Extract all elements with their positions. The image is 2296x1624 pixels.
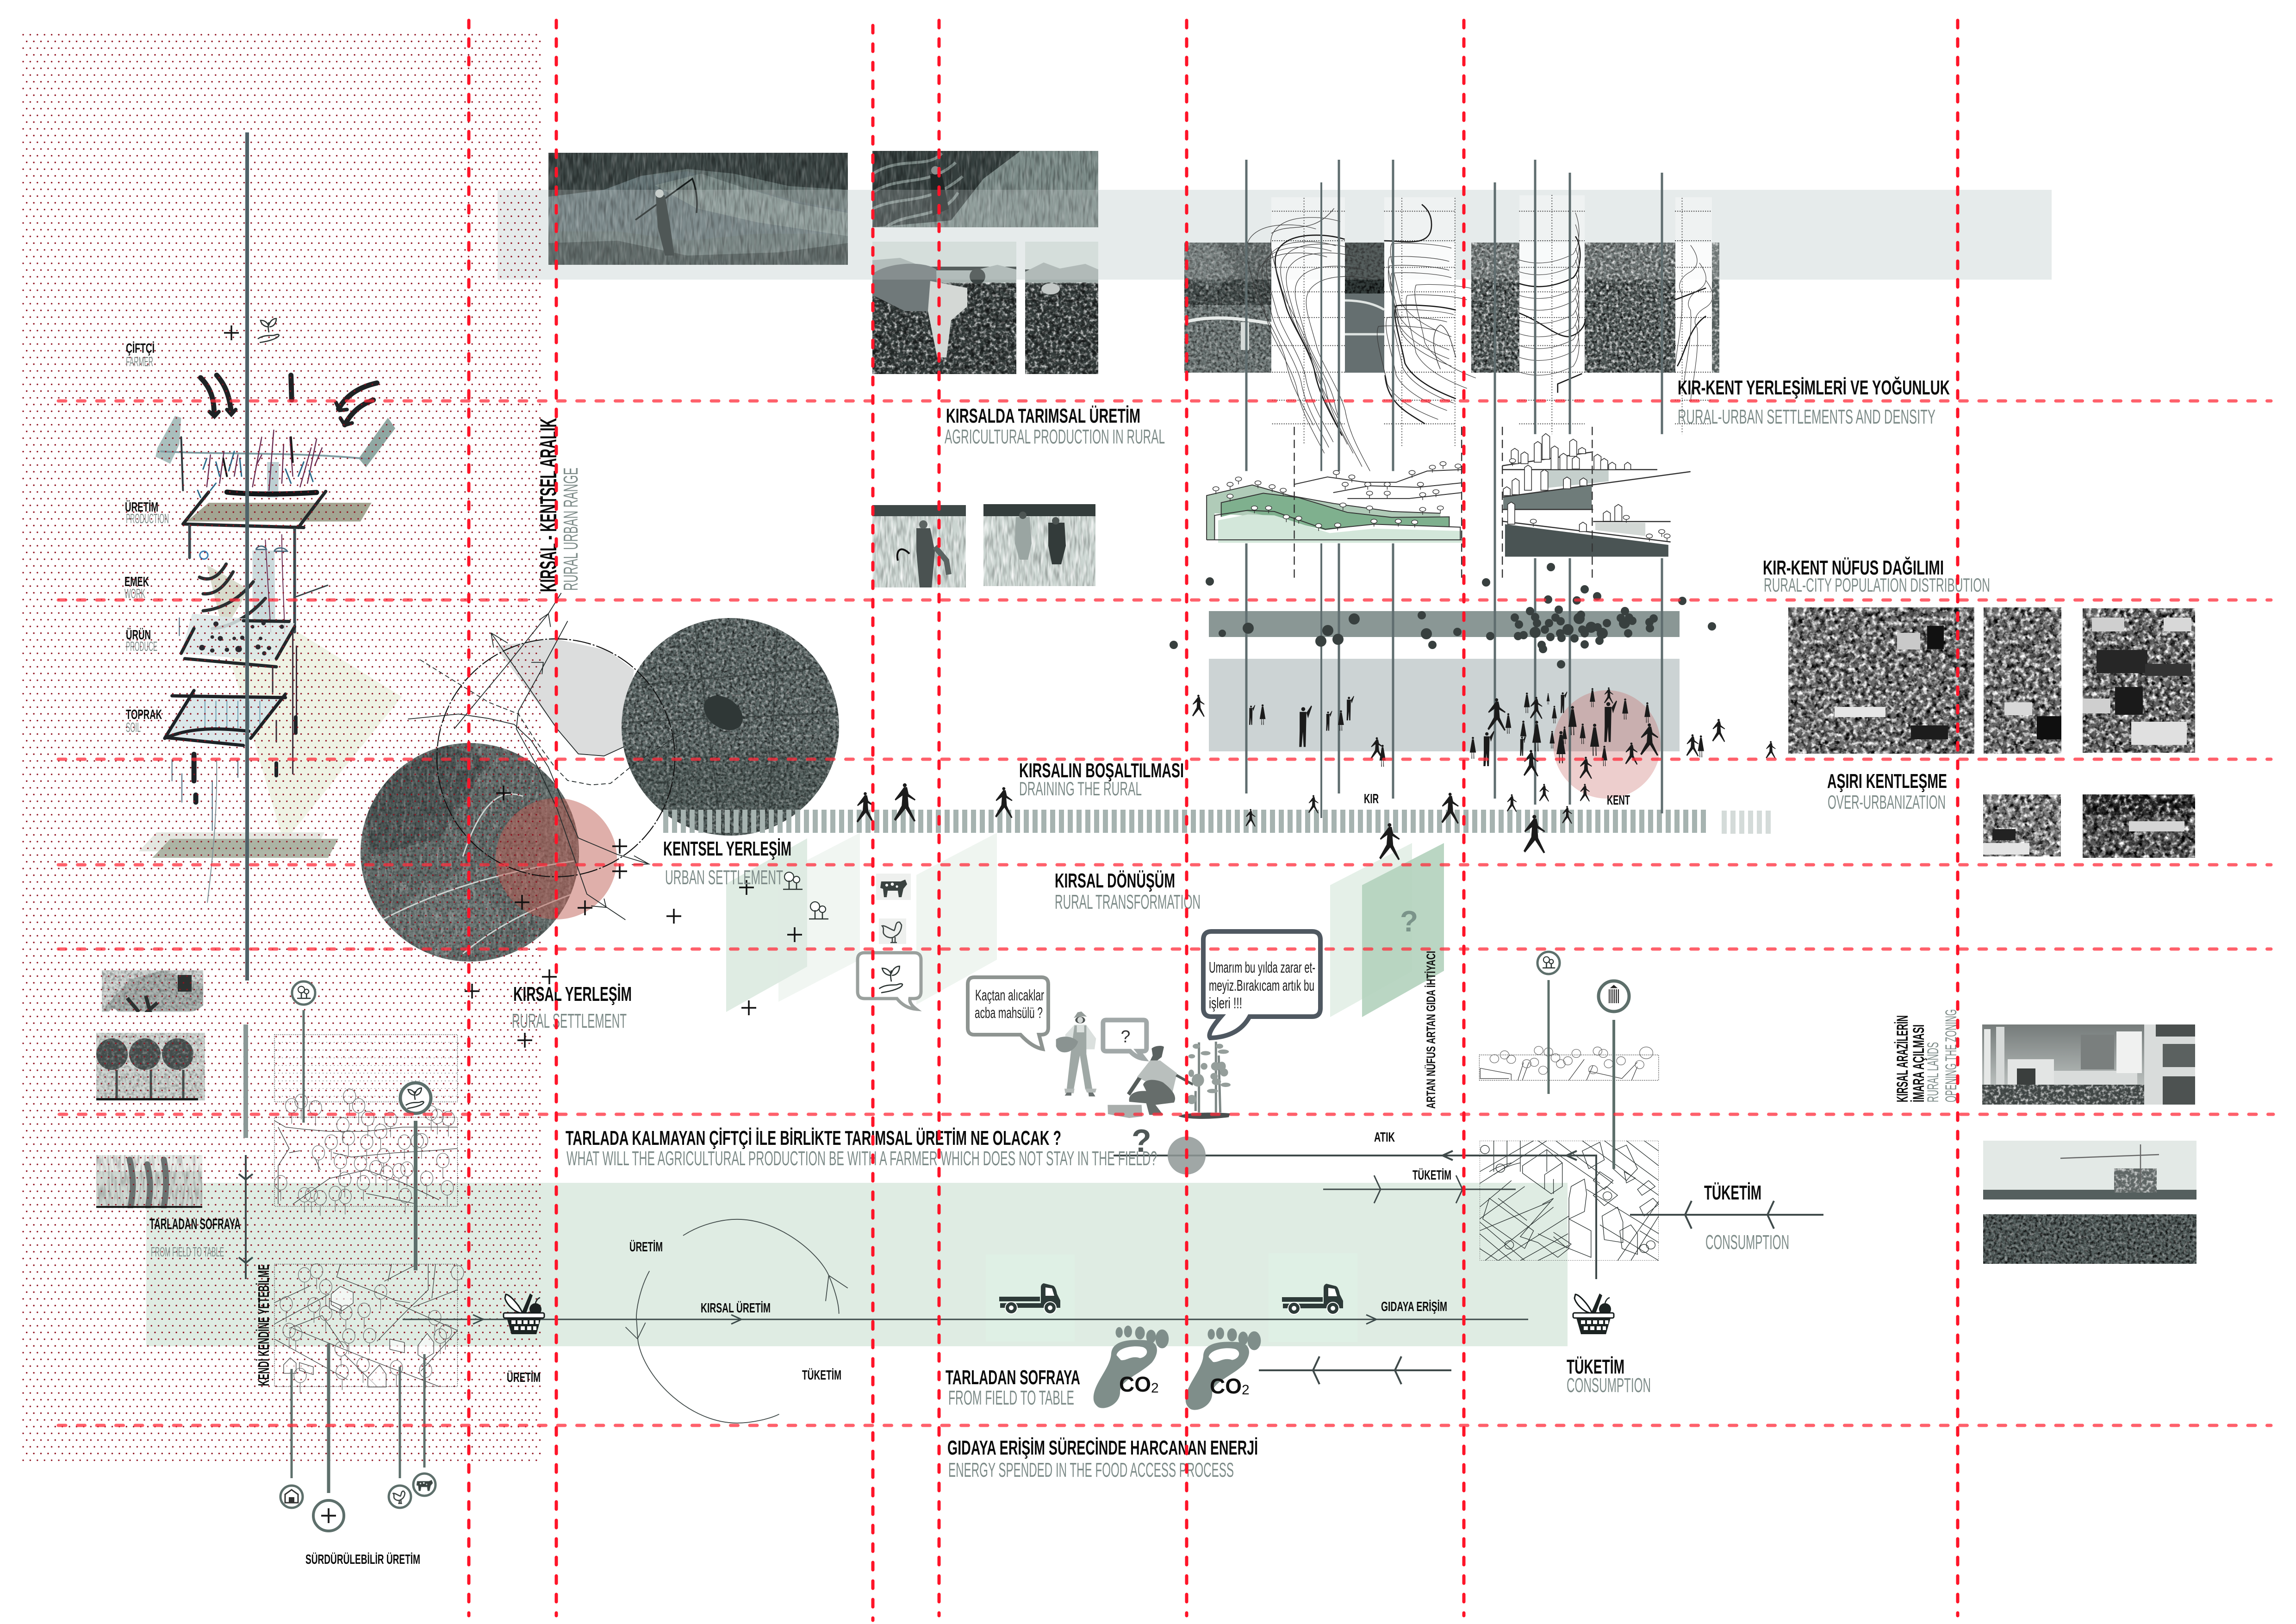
heading: consumption right: TÜKETİM — [1704, 1181, 1761, 1204]
crouching man — [1108, 1046, 1193, 1118]
icon: farm house — [280, 1369, 303, 1508]
heading: from field to table: FROM FIELD TO TABLE — [948, 1387, 1074, 1409]
heading: draining the rural: DRAINING THE RURAL — [1019, 778, 1142, 800]
small diagram labels: TÜKETİM — [802, 1368, 841, 1383]
heading: rural settlement: KIRSAL YERLEŞİM — [513, 983, 632, 1006]
heading: population distribution: RURAL-CITY POPULATION DISTRIBUTION — [1764, 574, 1990, 596]
photo: woman reaping — [872, 505, 966, 587]
watercolour sketch: farming layers — [156, 375, 395, 831]
icon: truck right — [1282, 1284, 1343, 1314]
icon: truck left — [999, 1283, 1060, 1314]
icon: trees — [292, 981, 315, 1123]
left layer labels: WORK — [124, 587, 145, 601]
speech bubble: farmer worry: Umarım bu yılda zarar et- — [1209, 959, 1315, 976]
heading: energy spent: ENERGY SPENDED IN THE FOOD ACCESS PROCESS — [948, 1459, 1234, 1481]
heading: rural settlement — [512, 983, 632, 1032]
shanty photo small — [2083, 794, 2195, 858]
vertical label: rising population: ARTAN NÜFUS ARTAN GIDA İHTİYACI — [1424, 951, 1438, 1109]
left layer labels: FARMER — [126, 355, 153, 369]
heading: rural urban range — [535, 418, 582, 592]
aerial photos strip: rural and urban settlements — [1184, 243, 1719, 373]
heading: what will agricultural production be: TARLADA KALMAYAN ÇİFTÇİ İLE BİRLİKTE TARIMSAL ÜRETİM NE OLACAK ? — [566, 1127, 1061, 1149]
photo: farmer bending in the field — [872, 242, 1016, 374]
label: from field to table in green band: TARLADAN SOFRAYA — [149, 1216, 241, 1232]
icon: barcode on city stem — [1599, 981, 1629, 1169]
speech bubble: sprout — [858, 953, 921, 1009]
photo: forest — [1983, 1214, 2196, 1264]
question bubble — [1103, 1020, 1146, 1059]
striped band: draining the rural — [663, 810, 1709, 833]
shanty photo — [2083, 608, 2195, 753]
stippled circle segment — [495, 639, 634, 756]
heading: consumption right — [1704, 1181, 1789, 1254]
consumption arrow right — [1630, 1201, 1823, 1229]
vertical labels: opening rural lands to zoning — [1894, 1009, 1960, 1102]
plus markers — [224, 325, 802, 1048]
heading: draining the rural — [1019, 759, 1184, 800]
dark sketch arrows over circles — [408, 593, 698, 920]
village isometric box — [274, 1264, 464, 1393]
plant and animal tiles on planes — [783, 872, 911, 944]
heading: settlements and density: KIR-KENT YERLEŞİMLERİ VE YOĞUNLUK — [1678, 376, 1950, 399]
small photos left column — [96, 970, 205, 1208]
small diagram labels — [305, 792, 1630, 1567]
rural section drawing — [1201, 427, 1463, 582]
silhouettes of migrating people — [857, 687, 1776, 860]
village plan box — [274, 1089, 457, 1216]
icon: sprout — [400, 1083, 431, 1270]
photo: crane on horizon — [1983, 1141, 2196, 1199]
halftone dot field — [20, 32, 541, 1463]
consumption arrow to city — [1323, 1175, 1516, 1203]
photo: two reapers — [983, 504, 1095, 586]
small diagram labels: KENT — [1607, 793, 1630, 808]
speech bubble: farmer worry — [1203, 931, 1320, 1038]
speech bubble: buyers — [968, 977, 1048, 1049]
small diagram labels: TÜKETİM — [1412, 1168, 1451, 1183]
pink city circle — [1553, 690, 1661, 799]
heading: energy spent — [947, 1437, 1258, 1481]
waste arrow — [1114, 1151, 1596, 1279]
band overlay on photos — [498, 190, 2052, 280]
icon: CO2 footprint right: 2 — [1242, 1382, 1250, 1398]
photo: terraced hillside with woman — [872, 151, 1098, 227]
cycle of rural production — [626, 1219, 848, 1423]
heading: agricultural production — [945, 405, 1165, 448]
heading: rural urban range: RURAL URBAN RANGE — [560, 468, 582, 591]
grey circle with question mark — [1132, 1123, 1206, 1174]
left layer labels: SOIL — [126, 720, 141, 735]
heading: over urbanization: OVER-URBANIZATION — [1828, 791, 1946, 813]
heading: agricultural production: AGRICULTURAL PRODUCTION IN RURAL — [945, 425, 1165, 448]
main vertical line left — [245, 132, 249, 981]
heading: rural urban range: KIRSAL - KENTSEL ARALIK — [535, 418, 561, 592]
heading: from field to table — [946, 1366, 1080, 1409]
speech bubble: farmer worry: işleri !!! — [1209, 994, 1242, 1012]
heading: population distribution: KIR-KENT NÜFUS DAĞILIMI — [1763, 556, 1944, 579]
pale striped band end — [1722, 811, 1771, 834]
vertical label: self sufficiency: KENDİ KENDİNE YETEBİLME — [255, 1264, 272, 1386]
city photo small — [1983, 794, 2061, 856]
heading: consumption under basket: CONSUMPTION — [1567, 1374, 1651, 1397]
thin sketch line lower — [207, 759, 217, 903]
woman with basket — [1056, 1012, 1096, 1096]
population bar dark — [1209, 611, 1680, 637]
grey background band — [498, 190, 2052, 280]
small diagram labels: KIR — [1364, 792, 1379, 806]
vertical settlement axis lines — [1246, 160, 1662, 818]
city photo 2 — [1984, 607, 2061, 754]
heading: consumption under basket — [1567, 1355, 1651, 1397]
left layer labels: ÇİFTÇİ — [126, 341, 155, 356]
small diagram labels: SÜRDÜRÜLEBİLİR ÜRETİM — [305, 1552, 420, 1567]
heading: urban settlement — [663, 837, 791, 889]
photo: farmer with scythe — [548, 153, 848, 265]
icon: basket left — [504, 1293, 544, 1334]
speech bubble: buyers: Kaçtan alıcaklar — [975, 987, 1044, 1004]
icon: CO2 footprint right — [1186, 1327, 1261, 1410]
pale triangle behind sketch — [222, 629, 402, 843]
left layer labels — [124, 341, 169, 735]
aerial circle: urban settlement — [622, 618, 839, 836]
heading: settlements and density — [1678, 376, 1950, 428]
illustration: farmers and plants — [1056, 1012, 1231, 1119]
truck tile left — [986, 1255, 1075, 1342]
aerial circle: rural settlement — [361, 743, 579, 962]
transformation planes with question mark: ? — [1400, 905, 1418, 938]
left layer labels: ÜRETİM — [125, 500, 158, 515]
tomato plants — [1187, 1042, 1231, 1112]
heading: what will agricultural production be — [566, 1127, 1157, 1170]
energy arrow — [1259, 1356, 1451, 1384]
photo: farmer in distance — [1025, 242, 1098, 374]
heading: rural transformation: KIRSAL DÖNÜŞÜM — [1055, 869, 1175, 892]
small diagram labels: ÜRETİM — [507, 1370, 541, 1385]
icon: CO2 footprint right: CO — [1210, 1374, 1242, 1398]
transformation planes left — [726, 833, 997, 1012]
top dotted field box — [274, 1035, 457, 1102]
heading: population distribution — [1763, 556, 1990, 596]
label: from field to table in green band: FROM FIELD TO TABLE — [151, 1245, 224, 1260]
heading: what will agricultural production be: WHAT WILL THE AGRICULTURAL PRODUCTION BE WITH A FARMER WHICH DOES NOT STAY IN THE FIELD? — [566, 1147, 1157, 1170]
heading: from field to table: TARLADAN SOFRAYA — [946, 1366, 1080, 1389]
icon: cow — [413, 1354, 436, 1496]
icon: plus — [313, 1343, 344, 1531]
icon: rooster — [389, 1367, 411, 1508]
icon: CO2 footprint left: 2 — [1151, 1380, 1159, 1396]
icon stems and circles: sustainable production — [280, 981, 436, 1531]
icon: sprout in hand — [258, 319, 279, 343]
top city plan box — [1479, 1046, 1659, 1081]
icon: trees on city stem — [1537, 952, 1560, 1094]
heading: consumption right: CONSUMPTION — [1705, 1231, 1789, 1254]
isometric city plan box — [1480, 1141, 1659, 1261]
small diagram labels: GIDAYA ERİŞİM — [1381, 1299, 1447, 1314]
truck tile right — [1269, 1253, 1357, 1342]
heading: agricultural production: KIRSALDA TARIMSAL ÜRETİM — [946, 405, 1140, 427]
heading: settlements and density: RURAL-URBAN SETTLEMENTS AND DENSITY — [1678, 406, 1935, 428]
heading: rural transformation — [1055, 869, 1201, 913]
city photo 1 — [1788, 607, 1974, 754]
contour map panels — [1246, 195, 1713, 477]
heading: urban settlement: URBAN SETTLEMENT — [665, 866, 783, 889]
label: from field to table in green band — [149, 1216, 241, 1260]
speech bubble: buyers: acba mahsülü ? — [975, 1004, 1043, 1021]
heading: rural transformation: RURAL TRANSFORMATION — [1055, 891, 1201, 913]
dash-dot circle — [437, 639, 675, 877]
icon: CO2 footprint left — [1094, 1325, 1169, 1408]
small diagram labels: KIRSAL ÜRETİM — [701, 1300, 771, 1316]
small diagram labels: ATIK — [1374, 1130, 1395, 1145]
dotted village boxes — [274, 1035, 464, 1393]
vertical labels: opening rural lands to zoning: İMARA AÇILMASI — [1910, 1024, 1928, 1102]
main arrow: rural production to food access — [403, 1315, 1528, 1324]
photo: city rising on farmland — [1982, 1024, 2195, 1105]
text: PRODUCTION — [126, 512, 169, 526]
heading: urban settlement: KENTSEL YERLEŞİM — [663, 837, 791, 860]
heading: rural settlement: RURAL SETTLEMENT — [512, 1010, 627, 1032]
population bar light — [1209, 659, 1680, 751]
left layer labels: ÜRÜN — [126, 627, 151, 643]
left vertical grey segment — [243, 1024, 248, 1138]
population dots — [1170, 563, 1716, 668]
urban section drawing — [1500, 427, 1692, 582]
vertical arrow down — [239, 1155, 253, 1279]
heading: over urbanization: AŞIRI KENTLEŞME — [1827, 770, 1947, 793]
pink circle overlay — [496, 798, 617, 919]
heading: over urbanization — [1827, 770, 1947, 813]
small diagram labels: ÜRETİM — [629, 1239, 663, 1255]
vertical labels: opening rural lands to zoning: OPENING THE ZONING — [1942, 1009, 1960, 1102]
heading: energy spent: GIDAYA ERİŞİM SÜRECİNDE HARCANAN ENERJİ — [947, 1437, 1258, 1459]
green band: from field to table — [146, 1183, 1568, 1346]
left layer labels: EMEK — [124, 575, 149, 589]
ground parallelograms — [139, 832, 338, 858]
speech bubble: farmer worry: meyiz.Bırakıcam artık bu — [1209, 977, 1314, 994]
vertical labels: opening rural lands to zoning: RURAL LANDS — [1924, 1042, 1942, 1102]
transformation planes with question mark — [1330, 843, 1444, 1017]
icon: CO2 footprint left: CO — [1119, 1372, 1151, 1396]
grey circle with question mark: ? — [1132, 1123, 1151, 1159]
heading: consumption under basket: TÜKETİM — [1567, 1355, 1624, 1378]
left layer labels: TOPRAK — [126, 707, 162, 722]
left layer labels: PRODUCE — [126, 639, 157, 654]
heading: draining the rural: KIRSALIN BOŞALTILMASI — [1019, 759, 1184, 782]
vertical labels: opening rural lands to zoning: KIRSAL ARAZİLERİN — [1894, 1015, 1911, 1102]
icon: basket right — [1573, 1293, 1614, 1334]
question bubble: ? — [1121, 1027, 1130, 1046]
